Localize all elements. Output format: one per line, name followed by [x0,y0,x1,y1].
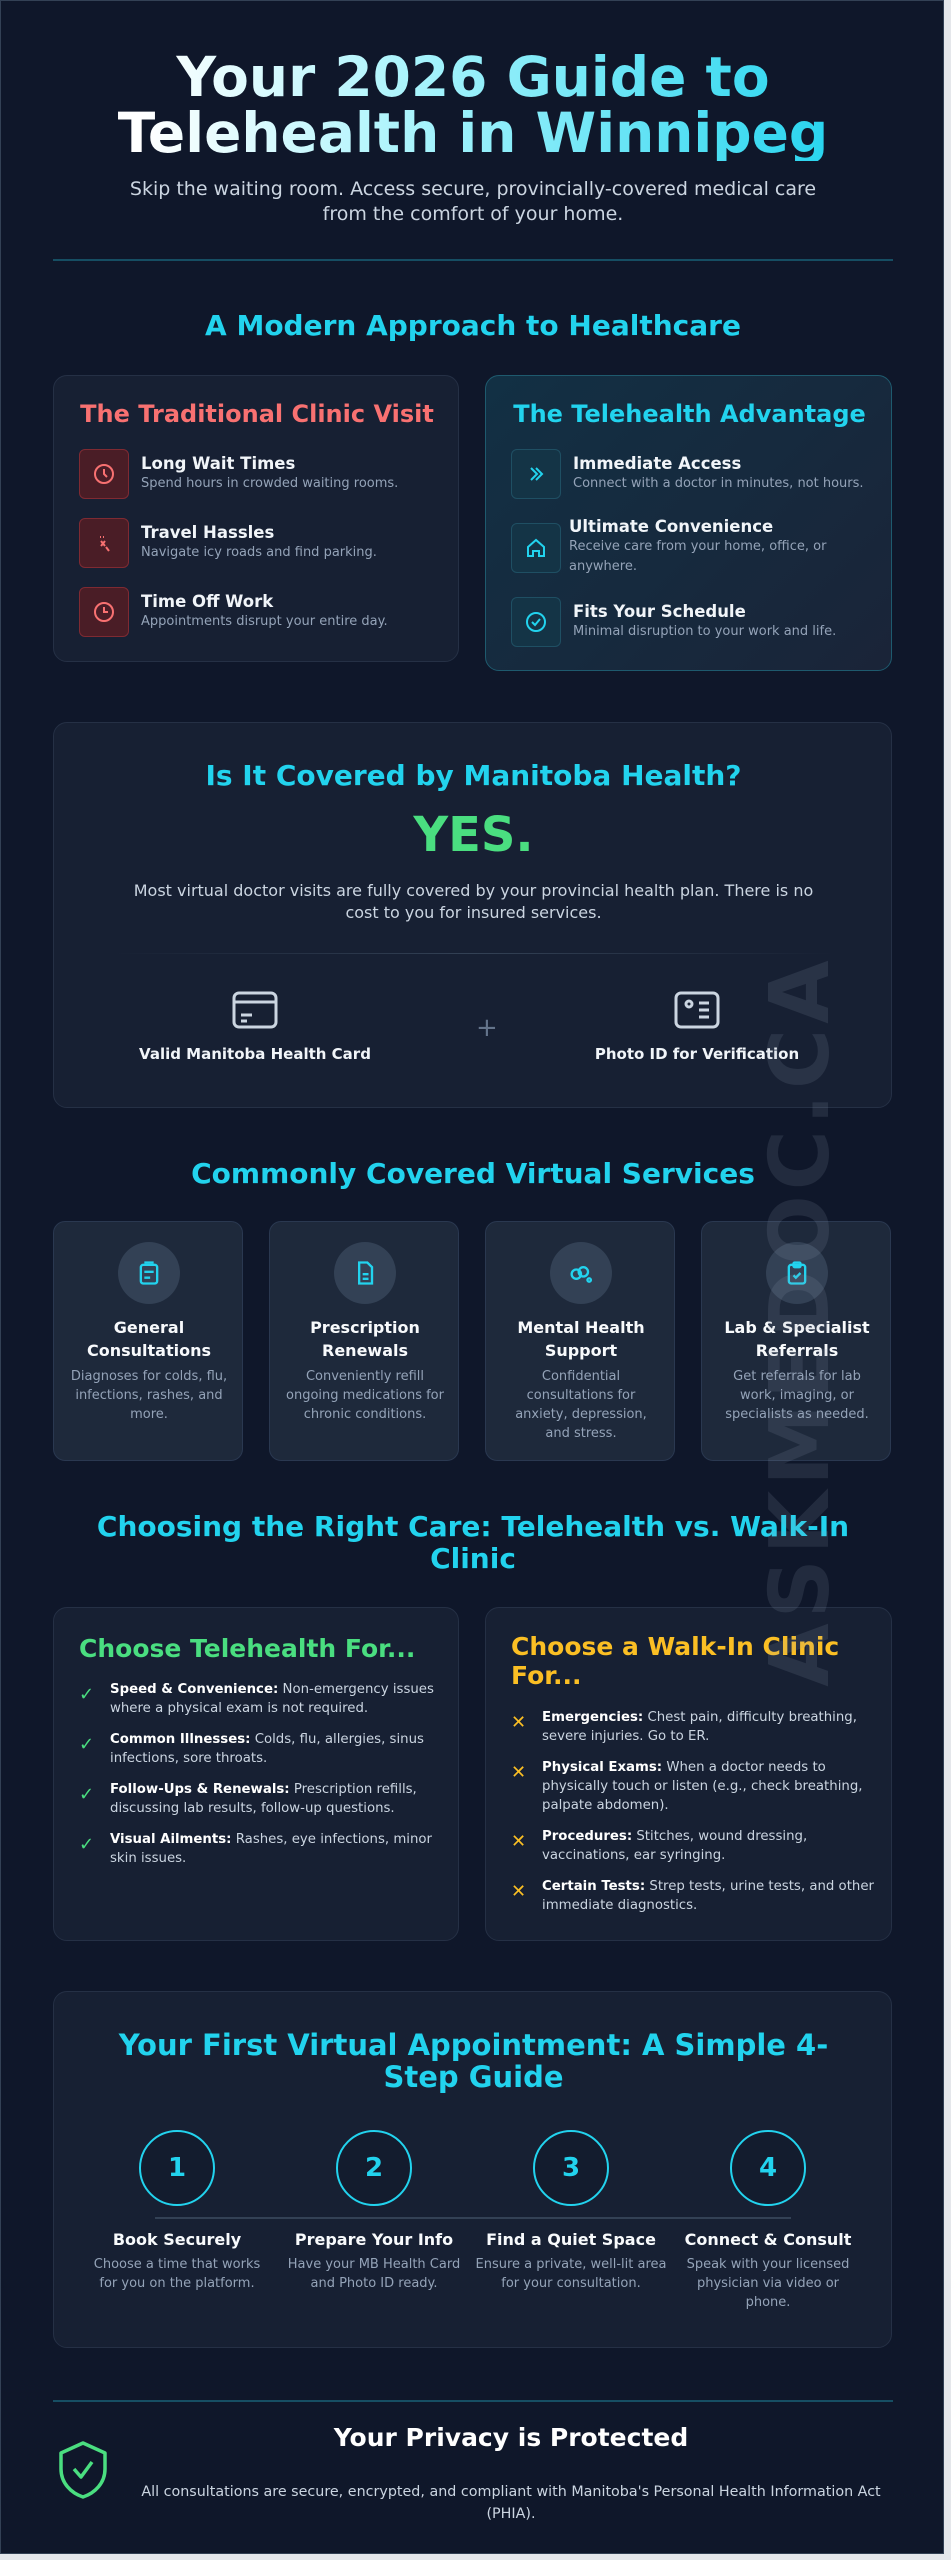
item: long wait: Long Wait Times [141,454,295,473]
service: general: General [114,1318,184,1337]
panel: telehealth advantage [485,375,892,671]
item: convenience: Receive care from your home, office, or anywhere. [569,539,826,574]
item: immediate [511,449,864,499]
service: mental health [485,1221,675,1461]
service: prescription [269,1221,459,1461]
service: prescription: Conveniently refill ongoing medications for chronic conditions. [286,1369,444,1422]
list: telehealth: Common Illnesses: Colds, flu, allergies, sinus infections, sore throats. [110,1732,424,1766]
service: general: Diagnoses for colds, flu, infections, rashes, and more. [71,1369,227,1422]
service: referrals [701,1221,891,1461]
item: travel: Navigate icy roads and find parking. [141,545,377,560]
step 3: Ensure a private, well-lit area for your consultation. [476,2257,666,2291]
service: referrals: Lab & Specialist [724,1318,870,1337]
service: referrals: Get referrals for lab work, imaging, or specialists as needed. [725,1369,869,1422]
step 2: Prepare Your Info [295,2230,453,2249]
step 1: Book Securely [113,2230,241,2249]
item: schedule: Fits Your Schedule [573,602,746,621]
item: schedule [511,597,836,647]
list: telehealth: ✓ [79,1734,94,1755]
list: telehealth [79,1682,434,1866]
requirement: photo id [595,992,799,1063]
item: immediate: Connect with a doctor in minutes, not hours. [573,476,864,491]
list: walk-in: ✕ [511,1762,526,1783]
service: mental health: Confidential consultations for anxiety, depression, and stress. [515,1369,647,1441]
step 4 [685,2130,852,2310]
list: walk-in: ✕ [511,1712,526,1733]
list: telehealth: ✓ [79,1834,94,1855]
list: walk-in: Emergencies: Chest pain, difficulty breathing, severe injuries. Go to ER. [542,1710,857,1744]
heading: choosing care: Choosing the Right Care: Telehealth vs. Walk-In Clinic [97,1510,849,1575]
item: convenience: Ultimate Convenience [569,517,773,536]
item: travel [79,518,377,568]
step 2 [288,2130,460,2291]
panel: coverage [53,722,892,1108]
list: walk-in: ✕ [511,1831,526,1852]
heading: steps: Your First Virtual Appointment: A Simple 4-Step Guide [119,2028,828,2094]
heading: traditional: The Traditional Clinic Visit [80,400,434,428]
service: general [53,1221,243,1461]
heading: walk-in for: Choose a Walk-In Clinic For... [511,1632,839,1690]
plus: + [476,1013,498,1043]
step 4: Connect & Consult [685,2230,851,2249]
service: prescription: Prescription [310,1318,420,1337]
coverage text: Most virtual doctor visits are fully covered by your provincial health plan. There is no cost to you for insured services. [134,881,813,922]
service: mental health: Mental Health [517,1318,645,1337]
item: long wait: Spend hours in crowded waiting rooms. [141,476,398,491]
list: telehealth: Visual Ailments: Rashes, eye infections, minor skin issues. [110,1832,432,1866]
list: telehealth: ✓ [79,1784,94,1805]
requirement: health card [139,992,371,1063]
subtitle: Skip the waiting room. Access secure, provincially-covered medical care from the comfort of your home. [130,178,816,225]
step 3 [476,2130,666,2291]
heading: modern approach: A Modern Approach to Healthcare [205,309,741,342]
service: referrals: Referrals [756,1341,838,1360]
item: travel: Travel Hassles [141,523,274,542]
step 1: Choose a time that works for you on the platform. [94,2257,260,2291]
watermark: ASKMEDOC.CA [753,955,848,1687]
panel: choose telehealth [53,1607,459,1941]
item: time off: Appointments disrupt your entire day. [141,614,388,629]
step 2: 2 [365,2153,383,2183]
heading: telehealth for: Choose Telehealth For... [79,1634,415,1663]
service: mental health: Support [545,1341,617,1360]
item: time off [79,587,388,637]
list: telehealth: Follow-Ups & Renewals: Prescription refills, discussing lab results, follow-up questions. [110,1782,417,1816]
list: walk-in [511,1710,874,1913]
panel: steps [53,1991,892,2348]
step 2: Have your MB Health Card and Photo ID ready. [288,2257,460,2291]
heading: services: Commonly Covered Virtual Services [191,1157,755,1190]
title: Your 2026 Guide to [176,45,770,109]
list: walk-in: Procedures: Stitches, wound dressing, vaccinations, ear syringing. [542,1829,807,1863]
list: telehealth: Speed & Convenience: Non-emergency issues where a physical exam is not required. [110,1682,434,1716]
list: telehealth: ✓ [79,1684,94,1705]
list: walk-in: Physical Exams: When a doctor needs to physically touch or listen (e.g., check breathing, palpate abdomen). [542,1760,862,1813]
title: Telehealth in Winnipeg [118,101,828,165]
step 4: 4 [759,2153,777,2183]
service: prescription: Renewals [322,1341,408,1360]
icon: shield [59,2441,107,2499]
step 3: 3 [562,2153,580,2183]
yes: YES. [413,807,534,863]
item: schedule: Minimal disruption to your work and life. [573,624,836,639]
list: walk-in: Certain Tests: Strep tests, urine tests, and other immediate diagnostics. [542,1879,874,1913]
privacy text: All consultations are secure, encrypted, and compliant with Manitoba's Personal Health Information Act (PHIA). [141,2484,881,2522]
item: immediate: Immediate Access [573,454,741,473]
step 1 [94,2130,260,2291]
panel: coverage: Valid Manitoba Health Card [139,1045,371,1063]
panel: traditional clinic [53,375,459,662]
step 4: Speak with your licensed physician via video or phone. [687,2257,849,2310]
panel: choose walk-in [485,1607,892,1941]
step 3: Find a Quiet Space [486,2230,656,2249]
panel: coverage: Photo ID for Verification [595,1045,799,1063]
item: convenience [511,517,826,574]
privacy heading: Your Privacy is Protected [334,2423,688,2452]
item: time off: Time Off Work [141,592,273,611]
item: long wait [79,449,398,499]
service: general: Consultations [87,1341,211,1360]
heading: advantage: The Telehealth Advantage [513,400,866,428]
step 1: 1 [168,2153,186,2183]
list: walk-in: ✕ [511,1881,526,1902]
heading: coverage: Is It Covered by Manitoba Health? [205,759,742,792]
title [1,49,945,161]
